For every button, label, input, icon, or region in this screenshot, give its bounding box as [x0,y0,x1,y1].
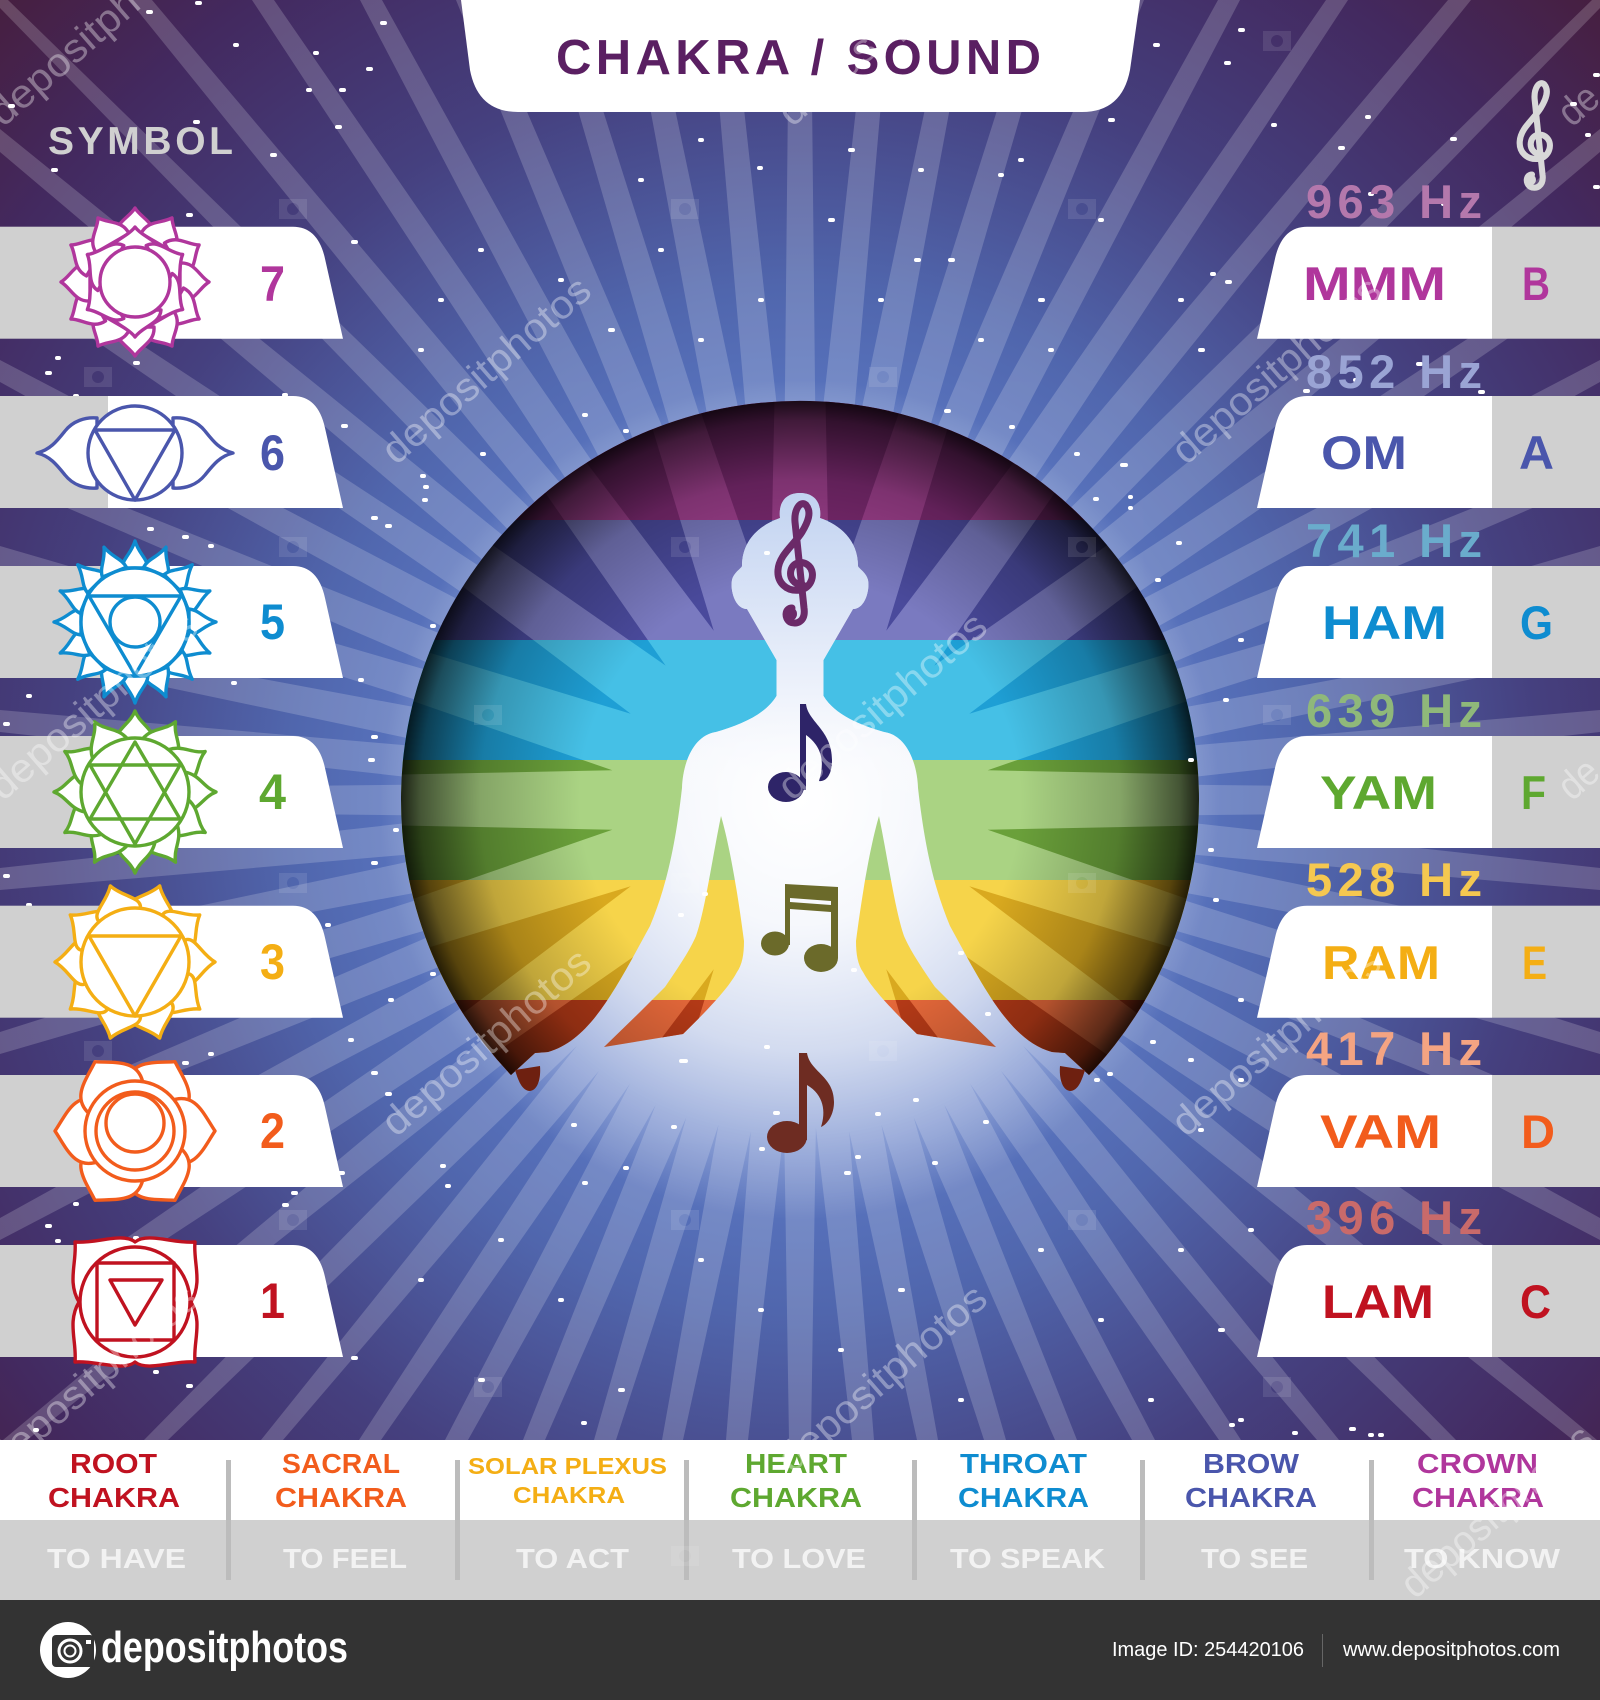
row 2 left: sacral chakra tab: 2 [260,1103,285,1159]
watermark overlay: depositphotos [373,268,600,473]
row 5 right: HAM / G / 741 Hz [1257,514,1600,678]
footer bar [0,1600,1600,1700]
row 6 left: brow chakra tab: 6 [260,425,285,481]
bottom strip: chakra names and verbs [0,1440,1600,1600]
row 5 left: throat chakra tab [0,566,343,678]
row 5 right: HAM / G / 741 Hz: 741 Hz [1306,514,1482,567]
row 6 right: OM / A / 852 Hz [1257,345,1600,508]
watermark overlay: depositphotos [769,604,996,809]
bottom strip: chakra names and verbs: SOLAR PLEXUS [468,1453,667,1479]
row 4 right: YAM / F / 639 Hz: F [1521,766,1546,819]
bottom strip: chakra names and verbs: CHAKRA [513,1482,625,1508]
bottom strip: chakra names and verbs: SACRAL [282,1448,400,1479]
row 7 left: crown chakra tab: 7 [260,256,285,312]
bottom strip: chakra names and verbs: THROAT [960,1448,1087,1479]
title tab [461,0,1140,112]
watermark overlay: depositphotos [1163,268,1390,473]
row 3 right: RAM / E / 528 Hz: E [1522,936,1547,989]
row 4 right: YAM / F / 639 Hz: 639 Hz [1306,684,1482,737]
bottom strip: chakra names and verbs: BROW [1203,1448,1300,1479]
row 3 left: solar plexus chakra tab: 3 [260,934,285,990]
bottom strip: chakra names and verbs: TO ACT [516,1543,629,1574]
icon: throat chakra [54,541,216,703]
row 6 right: OM / A / 852 Hz: A [1519,426,1554,479]
bottom strip: chakra names and verbs: HEART [745,1448,847,1479]
footer bar: Image ID: 254420106 [1112,1639,1304,1661]
icon: eighth note at the base [767,1053,834,1153]
icon: root chakra [73,1238,197,1366]
row 3 right: RAM / E / 528 Hz [1257,853,1600,1018]
bottom strip: chakra names and verbs: CHAKRA [958,1482,1089,1513]
bottom strip: chakra names and verbs: ROOT [70,1448,157,1479]
heading: symbol: SYMBOL [48,120,233,163]
row 1 right: LAM / C / 396 Hz: 396 Hz [1306,1191,1482,1244]
icon: treble clef top right [1520,83,1550,188]
row 2 right: VAM / D / 417 Hz: 417 Hz [1306,1022,1482,1075]
row 6 right: OM / A / 852 Hz: 852 Hz [1306,345,1482,398]
icon: treble clef on the head [778,504,812,623]
row 7 right: MMM / B / 963 Hz: B [1522,257,1550,310]
bottom strip: chakra names and verbs: CHAKRA [1185,1482,1317,1513]
row 2 right: VAM / D / 417 Hz: VAM [1320,1105,1441,1158]
row 4 right: YAM / F / 639 Hz [1257,684,1600,848]
bottom strip: chakra names and verbs: TO SPEAK [950,1543,1105,1574]
footer bar: depositphotos [101,1623,348,1672]
row 1 right: LAM / C / 396 Hz: C [1520,1275,1551,1328]
row 1 left: root chakra tab [0,1245,343,1357]
bottom strip: chakra names and verbs: TO LOVE [732,1543,866,1574]
row 3 right: RAM / E / 528 Hz: 528 Hz [1306,853,1482,906]
figure: head and shoulders of the silhouette [680,493,920,800]
icon: brow chakra eye [37,406,233,500]
bottom strip: chakra names and verbs: TO KNOW [1404,1543,1561,1574]
row 1 left: root chakra tab: 1 [260,1273,285,1329]
bottom strip: chakra names and verbs: CHAKRA [730,1482,862,1513]
icon: beamed notes on the belly [761,884,838,972]
row 7 right: MMM / B / 963 Hz [1257,175,1600,339]
bottom strip: chakra names and verbs: CHAKRA [48,1482,180,1513]
bottom strip: chakra names and verbs: CROWN [1417,1448,1538,1479]
row 2 right: VAM / D / 417 Hz: D [1521,1105,1555,1158]
row 7 right: MMM / B / 963 Hz: MMM [1303,257,1446,310]
watermark overlay: depositphotos [373,940,600,1145]
row 3 left: solar plexus chakra tab [0,906,343,1018]
icon: sixteenth note on the throat [768,704,832,802]
row 4 right: YAM / F / 639 Hz: YAM [1320,766,1437,819]
row 1 right: LAM / C / 396 Hz: LAM [1322,1275,1434,1328]
bottom strip: chakra names and verbs: CHAKRA [1412,1482,1544,1513]
row 3 right: RAM / E / 528 Hz: RAM [1322,936,1440,989]
footer bar: www.depositphotos.com [1342,1639,1560,1661]
row 1 right: LAM / C / 396 Hz [1257,1191,1600,1357]
bottom strip: chakra names and verbs: CHAKRA [275,1482,407,1513]
row 2 left: sacral chakra tab [0,1075,343,1187]
row 6 right: OM / A / 852 Hz: OM [1321,426,1407,479]
row 2 right: VAM / D / 417 Hz [1257,1022,1600,1187]
row 5 left: throat chakra tab: 5 [260,594,285,650]
row 5 right: HAM / G / 741 Hz: G [1520,596,1553,649]
row 6 left: brow chakra tab [0,396,343,508]
row 4 left: heart chakra tab: 4 [259,764,286,820]
watermark overlay: depositphotos [1163,940,1390,1145]
row 5 right: HAM / G / 741 Hz: HAM [1322,596,1447,649]
icon: heart chakra [54,711,216,873]
bottom strip: chakra names and verbs: TO SEE [1201,1543,1308,1574]
icon: solar plexus chakra [55,879,215,1045]
title tab: CHAKRA / SOUND [556,31,1041,85]
row 7 right: MMM / B / 963 Hz: 963 Hz [1306,175,1482,228]
bottom strip: chakra names and verbs: TO HAVE [47,1543,186,1574]
row 7 left: crown chakra tab [0,227,343,339]
bottom strip: chakra names and verbs: TO FEEL [283,1543,407,1574]
row 4 left: heart chakra tab [0,736,343,848]
chakra colour disc behind the meditating figure [396,396,1204,1116]
icon: crown chakra lotus [61,208,209,356]
watermark overlay: depositphotos [769,1276,996,1481]
icon: sacral chakra [55,1045,215,1217]
